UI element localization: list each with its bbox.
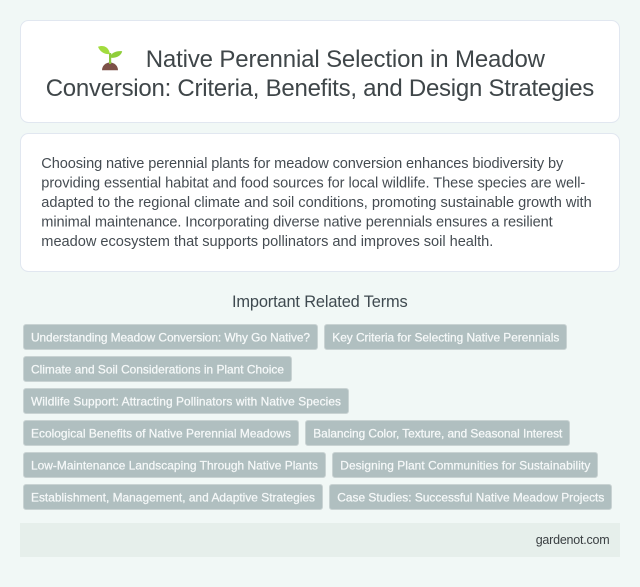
chip: climate and soil (24, 356, 292, 382)
related term chips (24, 324, 612, 510)
chip: key criteria (324, 324, 566, 350)
chip: establishment and management (24, 484, 322, 510)
chip: understanding meadow conversion (24, 324, 318, 350)
chip: low-maintenance landscaping (24, 452, 326, 478)
chip: case studies (330, 484, 612, 510)
chip: balancing color (306, 420, 570, 446)
paragraph text: providing essential habitat and food sources for local wildlife. These species are well- (41, 176, 585, 192)
chip: case studies: Case Studies: Successful Native Meadow Projects (337, 490, 604, 504)
chip: balancing color: Balancing Color, Texture, and Seasonal Interest (313, 426, 563, 440)
panel: summary paragraph (20, 134, 620, 272)
title: Conversion: Criteria, Benefits, and Design Strategies (46, 75, 594, 102)
chip: climate and soil: Climate and Soil Considerations in Plant Choice (31, 362, 284, 376)
paragraph text: adapted to the regional climate and soil conditions, promoting sustainable growth with (41, 195, 592, 211)
paragraph text: meadow ecosystem that supports pollinators and improves soil health. (41, 234, 493, 250)
chip: wildlife support (24, 388, 348, 414)
paragraph text (41, 156, 592, 250)
title (46, 46, 594, 102)
heading: important related terms: Important Related Terms (232, 293, 408, 311)
chip: designing plant communities (332, 452, 598, 478)
title: Native Perennial Selection in Meadow (146, 46, 546, 73)
panel: title header (20, 20, 620, 122)
chip: establishment and management: Establishment, Management, and Adaptive Strategies (31, 490, 315, 504)
footer credit: gardenot.com (536, 533, 610, 547)
footer bar (20, 523, 620, 557)
icon: sprout (98, 46, 122, 70)
chip: ecological benefits (24, 420, 298, 446)
chip: wildlife support: Wildlife Support: Attracting Pollinators with Native Species (31, 394, 341, 408)
chip: designing plant communities: Designing Plant Communities for Sustainability (340, 458, 590, 472)
chip: understanding meadow conversion: Understanding Meadow Conversion: Why Go Native? (31, 330, 310, 344)
chip: low-maintenance landscaping: Low-Maintenance Landscaping Through Native Plants (31, 458, 318, 472)
chip: key criteria: Key Criteria for Selecting Native Perennials (332, 330, 559, 344)
paragraph text: minimal maintenance. Incorporating diverse native perennials ensures a resilient (41, 214, 553, 230)
chip: ecological benefits: Ecological Benefits of Native Perennial Meadows (31, 426, 291, 440)
paragraph text: Choosing native perennial plants for meadow conversion enhances biodiversity by (41, 156, 564, 172)
